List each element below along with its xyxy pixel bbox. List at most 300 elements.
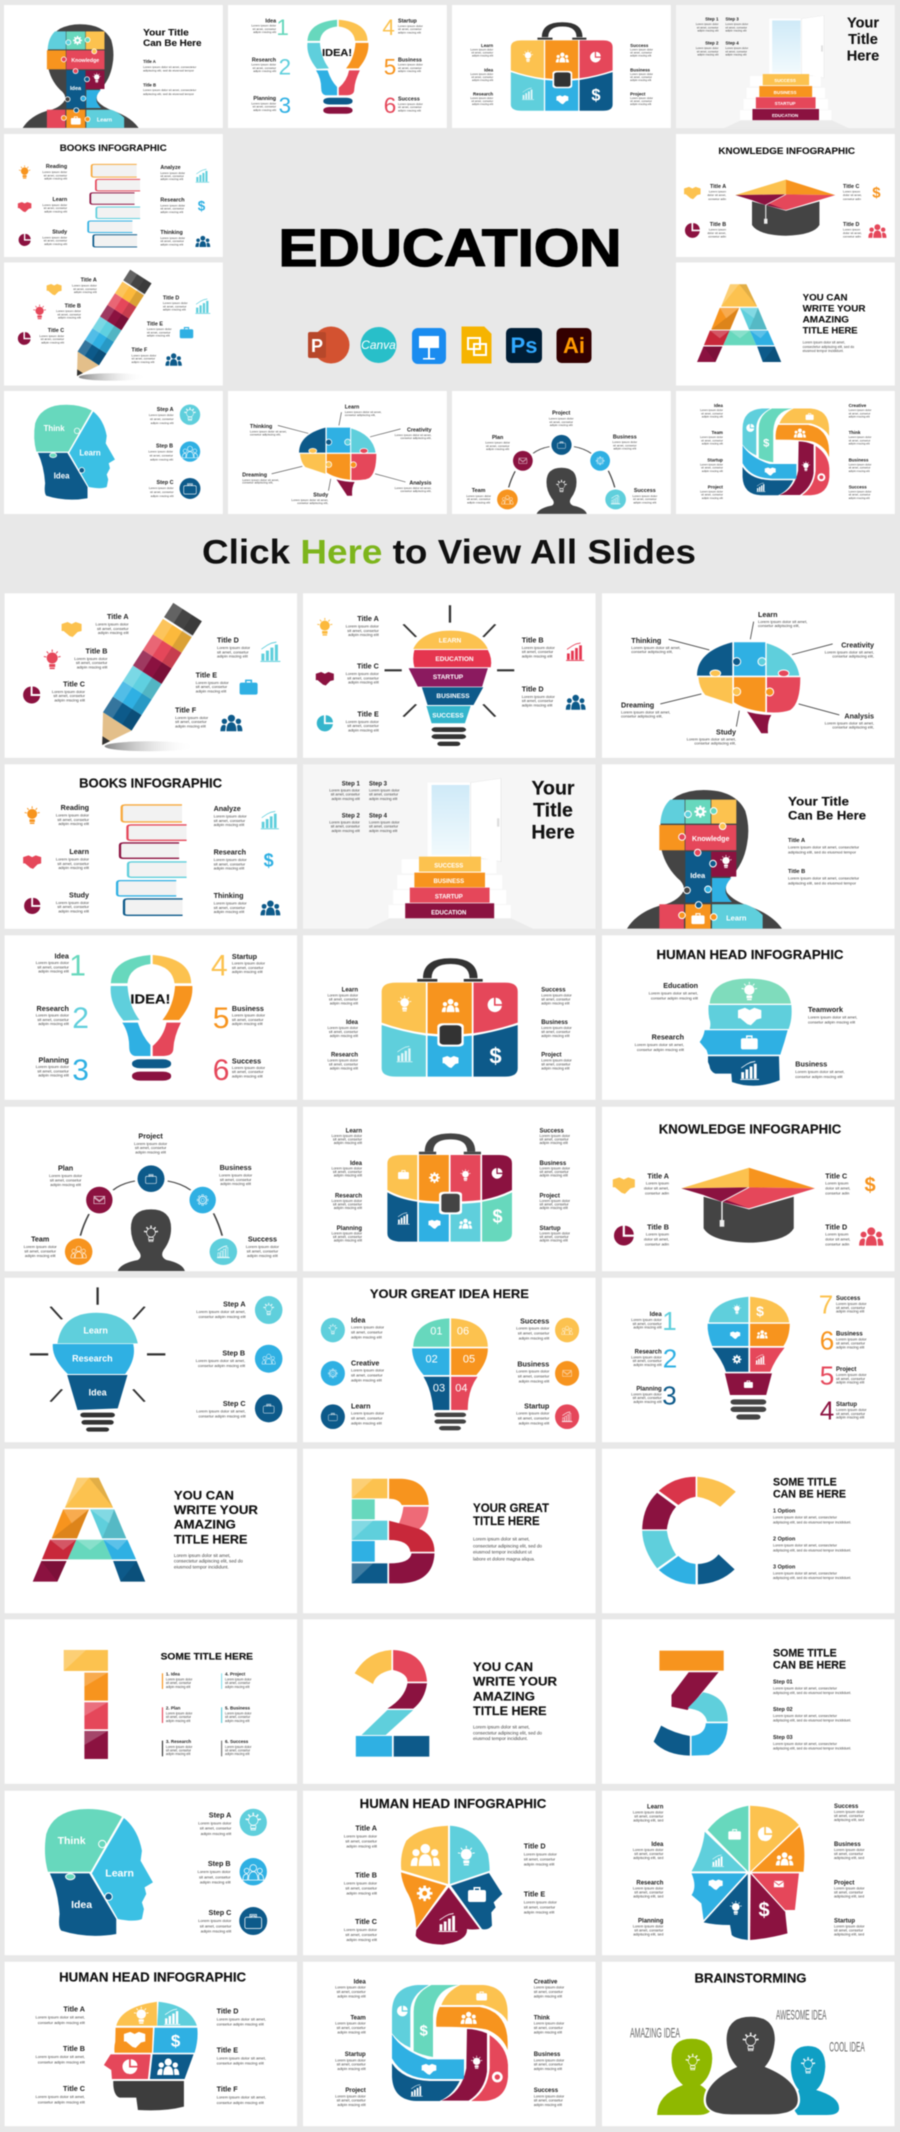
text labels: Lorem ipsum dolor bbox=[24, 1244, 57, 1249]
text labels: Research bbox=[652, 1032, 684, 1041]
thumbnail text: adipin mscing elit bbox=[44, 176, 67, 180]
thumbnail text: Analysis bbox=[409, 481, 431, 487]
text labels: sit amet, consetur bbox=[196, 684, 228, 689]
text labels: BOOKS INFOGRAPHIC bbox=[79, 776, 222, 790]
text labels: sit amet, consetur bbox=[345, 1885, 378, 1890]
thumbnail text: Title D bbox=[843, 222, 859, 228]
thumbnail text: Lorem ipsum dolor bbox=[163, 301, 188, 305]
text labels bbox=[36, 949, 266, 1087]
text labels: Business bbox=[517, 1359, 549, 1368]
thumbnail text bbox=[42, 143, 206, 246]
text labels bbox=[773, 1647, 851, 1751]
thumbnail text bbox=[70, 28, 201, 124]
thumbnail text: Idea bbox=[484, 67, 494, 72]
text labels: sit amet, consetur bbox=[329, 997, 359, 1001]
text labels: Lorem ipsum dolor sit amet, bbox=[196, 1408, 246, 1413]
thumbnail text: adipin mscing elit bbox=[702, 469, 723, 473]
panel: thumbnail brain puzzle bbox=[228, 391, 447, 514]
text labels: Study bbox=[69, 890, 89, 899]
text labels: adipin mscing elit bbox=[332, 829, 360, 833]
text labels: Reading bbox=[61, 803, 89, 812]
text labels: EDUCATION bbox=[435, 656, 474, 663]
text labels: Creative bbox=[351, 1359, 379, 1368]
illustration: segmented bulb outline bbox=[111, 955, 192, 1081]
text labels: Lorem ipsum dolor bbox=[331, 1166, 363, 1170]
text labels: consetur adipin mscing elit bbox=[198, 1363, 246, 1368]
thumbnail text: IDEA! bbox=[322, 48, 352, 59]
thumbnail text: adipin mscing elit bbox=[486, 447, 509, 451]
thumbnail text: $ bbox=[591, 87, 601, 105]
panel: number three slide bbox=[602, 1619, 894, 1784]
text labels: Lorem ipsum dolor bbox=[56, 812, 90, 817]
thumbnail text: Title E bbox=[147, 321, 163, 327]
thumbnail text: Lorem ipsum dolor bbox=[849, 463, 871, 467]
text labels: Learn bbox=[69, 847, 89, 856]
text labels: sit amet, consetur bbox=[524, 1856, 556, 1861]
text labels: 2 Option bbox=[773, 1537, 796, 1543]
thumbnail text: adipin mscing elit bbox=[725, 53, 747, 57]
thumbnail text: Creativity bbox=[407, 427, 431, 433]
thumbnail text: sit amet, consetur bbox=[549, 420, 573, 424]
text labels bbox=[24, 1131, 280, 1258]
text labels: Learn bbox=[83, 1325, 108, 1335]
panel: seven part bulb slide bbox=[602, 1278, 894, 1442]
text labels: 03 bbox=[433, 1383, 445, 1395]
text labels: sit amet, consetur bbox=[214, 905, 246, 910]
heading: call to action: Click Here to View All Slides bbox=[202, 534, 696, 572]
text labels bbox=[335, 1979, 565, 2107]
text labels: Lorem ipsum dolor bbox=[633, 1886, 664, 1890]
thumbnail text: sit amet, consetur bbox=[697, 25, 719, 29]
text labels: Project bbox=[540, 1194, 560, 1200]
text labels: STARTUP bbox=[435, 894, 463, 900]
text labels: Lorem ipsum dolor bbox=[834, 1886, 865, 1890]
thumbnail text: Planning bbox=[253, 96, 276, 102]
text labels: Idea bbox=[55, 952, 70, 961]
thumbnail text: sit amet, consetur bbox=[163, 304, 186, 308]
thumbnail text: Lorem ipsum dolor sit amet, bbox=[291, 498, 328, 502]
text labels: Idea bbox=[346, 1020, 359, 1026]
thumbnail text: adipin mscing elit bbox=[253, 30, 276, 34]
text labels bbox=[631, 1289, 867, 1426]
illustration: briefcase eight sections bbox=[387, 1133, 512, 1242]
text labels: consetur adipin mscing elit bbox=[637, 1047, 685, 1052]
text labels: Lorem ipsum dolor sit amet, consectetur bbox=[773, 1571, 838, 1575]
text labels: adipin mscing elit bbox=[348, 632, 380, 637]
thumbnail text: sit amet, consetur bbox=[471, 51, 493, 55]
text labels: adipin mscing elit bbox=[337, 2067, 366, 2071]
text labels: adipin mscing elit bbox=[369, 797, 397, 801]
text labels: eiusmod tempor incididunt. bbox=[174, 1564, 229, 1569]
text labels: Project bbox=[345, 2088, 366, 2094]
text labels: adipin mscing elit bbox=[836, 1416, 864, 1420]
illustration: pencil with icons bbox=[23, 603, 280, 754]
text labels: Title D bbox=[217, 636, 239, 645]
thumbnail text bbox=[44, 407, 174, 498]
text labels: Business bbox=[540, 1161, 567, 1167]
text labels: sit amet, consetur bbox=[37, 964, 70, 969]
illustration: three band bulb bbox=[30, 1287, 282, 1432]
thumbnail text: adipin mscing elit bbox=[630, 102, 652, 106]
text labels: Step 01 bbox=[773, 1679, 793, 1685]
text labels: consetur adin bbox=[645, 1241, 669, 1246]
text labels: Lorem ipsum dolor bbox=[49, 1173, 83, 1178]
thumbnail text: 1 bbox=[276, 15, 289, 40]
text labels: sit amet, consetur bbox=[200, 1923, 232, 1928]
panel: number one slide bbox=[5, 1619, 297, 1784]
text labels: sit amet, consetur bbox=[337, 2026, 366, 2030]
thumbnail text: adipin mscing elit bbox=[849, 415, 870, 419]
panel: thumbnail pencil bbox=[4, 262, 223, 386]
text labels: sit amet, consetur bbox=[337, 1990, 366, 1994]
text labels: SOME TITLE bbox=[773, 1647, 837, 1659]
text labels: sit amet, consetur bbox=[76, 660, 108, 665]
text labels: adipin mscing elit bbox=[38, 1021, 70, 1026]
text labels: Lorem ipsum dolor sit amet, bbox=[687, 736, 736, 741]
icon: PowerPoint: P bbox=[311, 336, 323, 356]
text labels bbox=[174, 1488, 258, 1569]
text labels: adipin mscing elit bbox=[351, 1335, 383, 1340]
text labels: sit amet, consetur bbox=[534, 2026, 564, 2030]
text labels: consetur adipiscing elit, bbox=[631, 649, 673, 654]
text labels: 04 bbox=[455, 1383, 468, 1395]
thumbnail text: Research bbox=[473, 92, 493, 97]
thumbnail text: adipin mscing elit bbox=[160, 210, 183, 214]
text labels: Lorem ipsum dolor sit amet, bbox=[473, 1725, 530, 1730]
text labels: Lorem ipsum bbox=[646, 1181, 670, 1186]
text labels: sit amet, consetur bbox=[57, 861, 90, 866]
thumbnail text: adipin mscing elit bbox=[160, 177, 183, 181]
text labels: sit amet, consetur bbox=[518, 1416, 550, 1421]
thumbnail text: Lorem ipsum dolor bbox=[160, 171, 185, 175]
text labels: adipin mscing elit bbox=[58, 908, 90, 913]
thumbnail text: Lorem ipsum dolor bbox=[42, 203, 67, 207]
text labels: adipin mscing elit bbox=[524, 1910, 555, 1915]
illustration: three head silhouettes bbox=[657, 2016, 839, 2115]
thumbnail text: Lorem ipsum dolor bbox=[251, 24, 276, 28]
illustration: book stack bbox=[23, 805, 280, 915]
thumbnail text: sit amet, consetur bbox=[44, 173, 67, 177]
text labels: sit amet, consetur bbox=[50, 1177, 82, 1182]
text labels: adipin mscing elit bbox=[334, 1141, 362, 1145]
panel: puzzle head slide bbox=[602, 764, 894, 929]
text labels: Step A bbox=[223, 1300, 246, 1309]
text labels: Lorem ipsum dolor bbox=[329, 820, 361, 824]
panel: three band bulb slide bbox=[5, 1278, 297, 1442]
text labels: Lorem ipsum dolor bbox=[540, 1134, 571, 1138]
thumbnail text: Lorem ipsum dolor sit amet, bbox=[395, 433, 432, 437]
text labels: sit amet, consetur bbox=[331, 793, 361, 797]
text labels bbox=[633, 1804, 865, 1936]
text labels: adipin mscing elit bbox=[334, 1206, 362, 1210]
thumbnail text: Lorem ipsum dolor sit amet, bbox=[803, 341, 845, 345]
text labels: Lorem ipsum dolor bbox=[329, 788, 361, 792]
icon: Canva bbox=[360, 327, 396, 363]
thumbnail text: sit amet, consetur bbox=[701, 466, 723, 470]
text labels: adipin mscing elit bbox=[330, 1066, 358, 1070]
thumbnail text: sit amet, consetur bbox=[849, 466, 870, 470]
text labels: sit amet, consetur bbox=[369, 793, 399, 797]
thumbnail text: sit amet, consetur bbox=[849, 493, 870, 497]
thumbnail text: Lorem ipsum bbox=[843, 227, 861, 231]
text labels: Success bbox=[232, 1056, 261, 1065]
text labels: Lorem ipsum dolor bbox=[522, 645, 555, 650]
text labels: sit amet, consetur bbox=[522, 649, 554, 654]
text labels: sit amet, consetur bbox=[225, 1749, 251, 1753]
thumbnail text: Lorem ipsum dolor bbox=[849, 408, 871, 412]
text labels: Startup bbox=[232, 952, 258, 961]
thumbnail text: Your Title bbox=[143, 28, 189, 38]
text labels: adipiscing elit, sed do eiusmod tempor incididunt. bbox=[773, 1520, 851, 1524]
thumbnail text: adipin mscing elit bbox=[151, 494, 174, 498]
text labels: Here bbox=[531, 821, 575, 843]
text labels: sit amet, consetur bbox=[834, 1890, 864, 1894]
text labels: Think bbox=[58, 1835, 86, 1847]
text labels: Lorem ipsum dolor bbox=[52, 689, 86, 694]
thumbnail text: Business bbox=[849, 458, 869, 463]
thumbnail text: sit amet, consetur bbox=[701, 493, 723, 497]
text labels: SUCCESS bbox=[432, 712, 464, 719]
thumbnail text: consetur adipiscing elit, bbox=[250, 433, 281, 437]
text labels: Title A bbox=[355, 1824, 377, 1833]
thumbnail text: Can Be Here bbox=[143, 38, 201, 48]
text labels bbox=[329, 777, 575, 916]
thumbnail text: $ bbox=[872, 185, 881, 202]
text labels: Lorem ipsum dolor sit amet, bbox=[36, 2015, 85, 2020]
thumbnail text: $ bbox=[198, 198, 206, 213]
text labels: Lorem ipsum dolor sit amet, bbox=[196, 1309, 246, 1314]
panel: great idea slide bbox=[303, 1278, 596, 1442]
thumbnail text: Learn bbox=[481, 43, 493, 48]
thumbnail text: Lorem ipsum dolor bbox=[549, 417, 574, 421]
text labels: Business bbox=[834, 1842, 861, 1848]
text labels: Title C bbox=[357, 662, 379, 671]
illustration: numbered bulb with circles bbox=[321, 1318, 579, 1430]
text labels: Knowledge bbox=[692, 836, 729, 843]
text labels: Lorem ipsum dolor bbox=[633, 1848, 664, 1852]
text labels: Lorem ipsum dolor bbox=[541, 993, 573, 997]
thumbnail text: SUCCESS bbox=[774, 78, 796, 83]
thumbnail text: Lorem ipsum dolor sit amet, bbox=[345, 410, 382, 414]
text labels bbox=[635, 948, 857, 1079]
text labels: sit amet, consetur bbox=[37, 1017, 70, 1022]
text labels: Research bbox=[331, 1052, 358, 1058]
text labels: consetur adipin mscing elit bbox=[38, 2020, 86, 2025]
text labels: Lorem ipsum dolor sit amet, consectetur bbox=[773, 1516, 838, 1520]
thumbnail text: Lorem ipsum dolor bbox=[470, 48, 493, 52]
thumbnail text: Lorem ipsum dolor bbox=[39, 334, 64, 338]
thumbnail text: TITLE HERE bbox=[803, 325, 858, 335]
thumbnail text: Dreaming bbox=[242, 472, 267, 478]
thumbnail text: Idea bbox=[54, 472, 70, 481]
text labels: adipiscing elit, sed bbox=[633, 1932, 663, 1936]
thumbnail text: Lorem ipsum dolor bbox=[132, 353, 156, 357]
text labels: sit amet, consetur bbox=[329, 1030, 359, 1034]
text labels: Lorem ipsum dolor bbox=[335, 2094, 366, 2098]
text labels: adipin mscing elit bbox=[50, 1182, 82, 1187]
text labels: HUMAN HEAD INFOGRAPHIC bbox=[656, 948, 844, 962]
text labels: adipiscing elit, sed bbox=[633, 1856, 663, 1860]
thumbnail text: Creative bbox=[849, 403, 867, 408]
text labels: sit amet, consetur bbox=[518, 1331, 550, 1336]
text labels: Step 03 bbox=[773, 1735, 793, 1741]
text labels: Learn bbox=[647, 1805, 664, 1811]
text labels: Lorem ipsum dolor sit amet, bbox=[196, 1358, 245, 1363]
text labels: 1. Idea bbox=[166, 1672, 180, 1677]
text labels: Business bbox=[534, 2052, 561, 2058]
text labels: Lorem ipsum dolor bbox=[166, 1712, 193, 1716]
illustration: five part head bbox=[401, 1826, 502, 1945]
text labels: Lorem ipsum dolor bbox=[836, 1302, 867, 1306]
text labels: consetur adipin mscing elit bbox=[38, 2059, 86, 2064]
thumbnail text: Lorem ipsum dolor bbox=[700, 489, 723, 493]
thumbnail text: sit amet, consetur bbox=[630, 99, 652, 103]
panel: number two slide bbox=[303, 1619, 596, 1784]
thumbnail text: consetur adin bbox=[843, 235, 861, 239]
text labels: Lorem ipsum dolor bbox=[36, 960, 70, 965]
text labels: sit amet, consetur bbox=[351, 1416, 383, 1421]
thumbnail text: adipin mscing elit bbox=[132, 360, 155, 364]
thumbnail text: BOOKS INFOGRAPHIC bbox=[60, 143, 167, 153]
thumbnail text: sit amet, consetur bbox=[471, 75, 493, 79]
text labels: Learn bbox=[105, 1868, 134, 1880]
text labels: adipin mscing elit bbox=[541, 1066, 569, 1070]
thumbnail text: dolor sit amet, bbox=[843, 193, 862, 197]
text labels: consectetur adipiscing elit, sed do bbox=[174, 1559, 243, 1564]
text labels: adipin mscing elit bbox=[54, 697, 86, 702]
text labels: Lorem ipsum dolor bbox=[232, 960, 266, 965]
text labels: adipin mscing elit bbox=[337, 2030, 366, 2034]
text labels: adipiscing elit, sed bbox=[834, 1932, 864, 1936]
text labels: adipin mscing elit bbox=[540, 1238, 568, 1242]
illustration: swirl ribbons bbox=[392, 1985, 508, 2101]
thumbnail text: Step 4 bbox=[725, 41, 739, 46]
thumbnail text: Lorem ipsum dolor sit amet, bbox=[250, 430, 287, 434]
text labels: $ bbox=[864, 1175, 876, 1197]
text labels bbox=[351, 1289, 550, 1426]
text labels: Lorem ipsum dolor bbox=[633, 1924, 664, 1928]
text labels: sit amet, consetur bbox=[541, 1030, 571, 1034]
thumbnail text: EDUCATION bbox=[772, 113, 798, 118]
icon row: software logos bbox=[308, 326, 592, 364]
panel: thumbnail network bbox=[452, 391, 671, 514]
text labels: Lorem ipsum dolor bbox=[534, 2022, 565, 2026]
text labels: adipin mscing elit bbox=[540, 1141, 568, 1145]
thumbnail text: Lorem ipsum dolor sit amet, consectetur bbox=[143, 88, 196, 92]
thumbnail text: Lorem ipsum dolor bbox=[160, 236, 185, 240]
text labels: Lorem ipsum dolor bbox=[540, 1231, 571, 1235]
thumbnail text: adipin mscing elit bbox=[702, 415, 723, 419]
text labels: Lorem ipsum dolor bbox=[335, 2058, 366, 2062]
text labels: 2. Plan bbox=[166, 1706, 181, 1711]
text labels: Lorem ipsum dolor sit amet, bbox=[217, 2016, 266, 2021]
panel: thumbnail briefcase bbox=[452, 5, 671, 128]
text labels: Lorem ipsum dolor bbox=[369, 788, 400, 792]
panel: thumbnail knowledge cap bbox=[676, 134, 895, 257]
text labels: Planning bbox=[39, 1056, 69, 1065]
text labels: sit amet, consetur bbox=[329, 1062, 359, 1066]
text labels: adipin mscing elit bbox=[836, 1381, 864, 1385]
text labels: adipiscing elit, sed bbox=[633, 1894, 663, 1898]
text labels: consectetur adipiscing elit, sed do bbox=[473, 1543, 542, 1548]
text labels: adipiscing elit, sed bbox=[834, 1894, 864, 1898]
text labels: Step B bbox=[222, 1349, 245, 1358]
thumbnail text: Lorem ipsum dolor bbox=[160, 203, 185, 207]
text labels: consetur adipin mscing elit bbox=[38, 2099, 86, 2104]
text labels: $ bbox=[420, 2023, 429, 2040]
text labels: Startup bbox=[540, 1226, 561, 1232]
panel: letter A slide bbox=[5, 1449, 297, 1613]
panel: door and stairs slide bbox=[303, 764, 596, 929]
text labels: sit amet, consetur bbox=[518, 1373, 550, 1378]
text labels: Research bbox=[37, 1004, 69, 1013]
icon: Canva: Canva bbox=[361, 338, 396, 352]
text labels: Lorem ipsum dolor bbox=[351, 1368, 385, 1373]
text labels: sit amet, consetur bbox=[347, 723, 379, 728]
text labels: sit amet, consetur bbox=[534, 2099, 564, 2103]
thumbnail text: Project bbox=[708, 484, 723, 489]
thumbnail text: sit amet, consetur bbox=[147, 330, 170, 334]
text labels: Lorem ipsum dolor bbox=[134, 1141, 168, 1146]
text labels: Idea bbox=[350, 1161, 363, 1167]
text labels: Lorem ipsum dolor sit amet, consectetur bbox=[788, 844, 860, 849]
text labels: Lorem ipsum dolor bbox=[836, 1338, 867, 1342]
text labels: sit amet, consetur bbox=[232, 1069, 264, 1074]
icon: Photoshop bbox=[506, 328, 542, 363]
icon: Google Slides bbox=[462, 327, 491, 363]
text labels: BRAINSTORMING bbox=[694, 1972, 806, 1986]
thumbnail text: Success bbox=[398, 97, 420, 103]
text labels: consetur adipin mscing elit bbox=[217, 2061, 265, 2066]
text labels: Lorem ipsum dolor bbox=[351, 1411, 385, 1416]
thumbnail text: Title A bbox=[143, 59, 156, 64]
text labels: sit amet, consetur bbox=[97, 626, 129, 631]
thumbnail text: Lorem ipsum dolor bbox=[630, 48, 653, 52]
thumbnail text: adipin mscing elit bbox=[472, 78, 493, 82]
text labels bbox=[690, 794, 866, 922]
text labels: Lorem ipsum dolor bbox=[335, 2022, 366, 2026]
text labels: SOME TITLE bbox=[773, 1477, 837, 1489]
thumbnail text: Lorem ipsum dolor bbox=[251, 101, 276, 105]
text labels: Team bbox=[31, 1235, 49, 1244]
text labels: consetur adin bbox=[825, 1241, 849, 1246]
text labels: Title E bbox=[357, 709, 379, 718]
thumbnail text: Lorem ipsum dolor bbox=[700, 463, 723, 467]
thumbnail text: sit amet, consetur bbox=[613, 443, 637, 447]
text labels: Lorem ipsum dolor bbox=[836, 1408, 867, 1412]
text labels: sit amet, consetur bbox=[166, 1715, 192, 1719]
text labels: sit amet, consetur bbox=[247, 1248, 279, 1253]
text labels: Lorem ipsum dolor bbox=[836, 1373, 867, 1377]
text labels: $ bbox=[489, 1043, 502, 1068]
text labels: HUMAN HEAD INFOGRAPHIC bbox=[59, 1971, 246, 1985]
text labels: adipin mscing elit bbox=[214, 866, 245, 871]
text labels: sit amet, consetur bbox=[540, 1203, 569, 1207]
text labels: 6. Success bbox=[225, 1739, 249, 1744]
text labels: sit amet, consetur bbox=[534, 2063, 564, 2067]
thumbnail text: WRITE YOUR bbox=[803, 303, 866, 313]
thumbnail text: adipin mscing elit bbox=[630, 78, 652, 82]
text labels: Project bbox=[138, 1131, 163, 1140]
text labels: adipin mscing elit bbox=[232, 1021, 263, 1026]
text labels: Lorem ipsum dolor sit amet, consectetur bbox=[773, 1544, 838, 1548]
text labels: sit amet, consetur bbox=[333, 1203, 363, 1207]
illustration: faceted letter A bbox=[33, 1478, 145, 1582]
thumbnail text: adipin mscing elit bbox=[44, 209, 67, 213]
text labels: adipin mscing elit bbox=[337, 1994, 366, 1998]
text labels: sit amet, consetur bbox=[541, 1062, 571, 1066]
thumbnail text: Lorem ipsum dolor bbox=[398, 63, 423, 67]
